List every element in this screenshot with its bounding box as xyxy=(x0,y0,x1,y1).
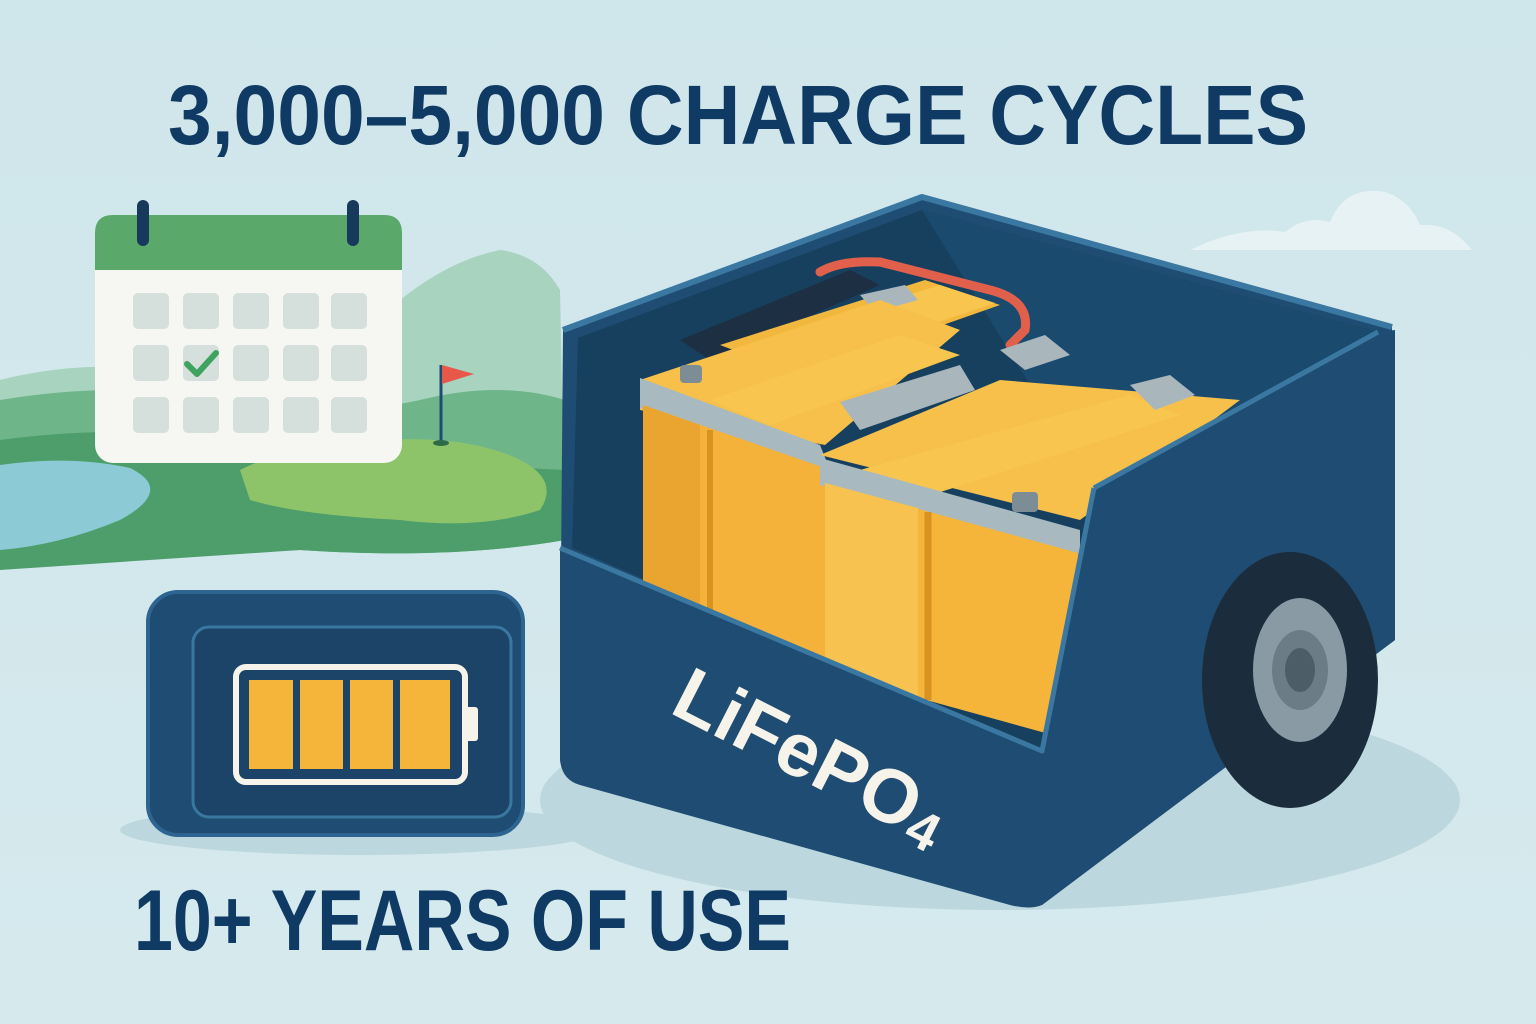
subtitle: 10+ years of use: 10+ YEARS OF USE xyxy=(134,873,791,969)
icon: golf flag xyxy=(433,365,474,446)
hills landscape xyxy=(0,250,565,570)
battery indicator device xyxy=(120,592,600,855)
title: 3,000–5,000 CHARGE CYCLES xyxy=(168,68,1308,162)
calendar icon xyxy=(95,200,402,463)
golf cart with LiFePO4 batteries xyxy=(540,197,1460,910)
cloud xyxy=(1190,191,1472,250)
golf cart with LiFePO4 batteries: LiFePO xyxy=(660,651,936,848)
golf cart with LiFePO4 batteries: 4 xyxy=(896,797,950,864)
